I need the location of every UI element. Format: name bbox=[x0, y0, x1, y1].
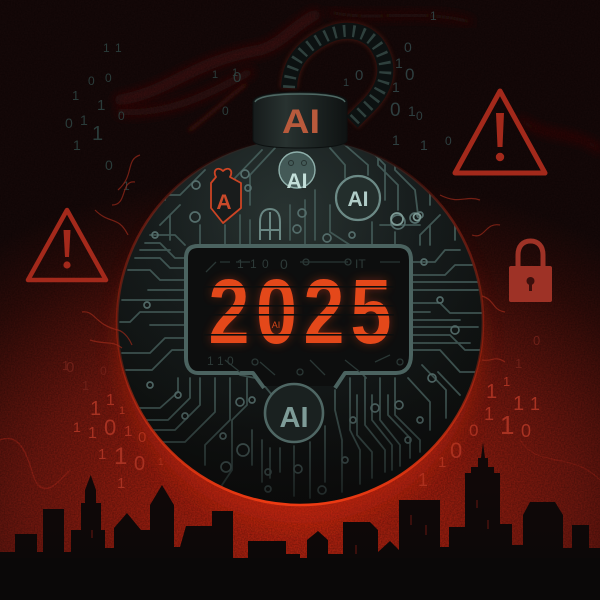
icon: AI circle right bbox=[336, 176, 380, 220]
binary digits: lower right: 1 bbox=[515, 356, 522, 371]
binary digits: upper right: 0 bbox=[405, 65, 414, 84]
binary digits: lower right: 1 bbox=[486, 381, 497, 403]
display binary marks: 1 bbox=[217, 354, 224, 368]
display binary marks: 0 bbox=[262, 257, 269, 271]
binary digits: upper left: 1 bbox=[212, 69, 218, 81]
display binary marks bbox=[207, 256, 366, 368]
icon: warning triangle left bbox=[28, 210, 106, 280]
digits glow: 2 bbox=[208, 260, 249, 363]
binary digits: upper right: 1 bbox=[343, 77, 349, 89]
icon: red AI badge: A bbox=[216, 191, 232, 214]
digits 2025: 2 bbox=[304, 260, 344, 363]
binary digits: lower left: 1 bbox=[82, 378, 89, 393]
ball glow halo bbox=[122, 167, 478, 523]
digits 2025: 0 bbox=[256, 260, 297, 363]
binary digits: lower right: 0 bbox=[521, 421, 531, 441]
binary digits: lower left: 0 bbox=[66, 359, 74, 376]
binary digits: upper left: 1 bbox=[115, 41, 122, 55]
binary digits: lower left: 1 bbox=[90, 398, 101, 420]
icon: red AI badge bbox=[211, 169, 241, 223]
digits 2025: 5 bbox=[350, 260, 391, 363]
display frame bbox=[186, 246, 411, 388]
binary digits: lower left: 0 bbox=[134, 453, 145, 475]
binary digits: lower left: 0 bbox=[104, 415, 116, 440]
display binary marks: 1 bbox=[237, 257, 244, 271]
binary digits: lower right: 0 bbox=[450, 438, 462, 463]
circuit nodes bbox=[144, 170, 459, 494]
digits glow: 2 bbox=[304, 260, 344, 363]
binary digits: lower left: 1 bbox=[114, 443, 127, 470]
digit segment gaps bbox=[204, 286, 394, 336]
binary digits: upper left: 1 bbox=[92, 123, 103, 145]
display inner circuit marks bbox=[206, 259, 403, 375]
binary digits: lower right: 1 bbox=[500, 410, 514, 440]
small AI label in display: AI bbox=[272, 320, 280, 330]
display binary marks: IT bbox=[355, 257, 366, 271]
binary digits: upper right: 1 bbox=[430, 9, 437, 23]
ground fade bbox=[0, 558, 600, 600]
icon: gear node bbox=[391, 213, 420, 225]
binary digits: upper right: 0 bbox=[390, 100, 401, 121]
city skyline bbox=[0, 442, 600, 600]
binary digits: upper left: 1 bbox=[97, 97, 105, 114]
display binary marks: 0 bbox=[280, 256, 288, 272]
neck label: AI bbox=[282, 103, 320, 141]
timer display bbox=[186, 246, 411, 388]
binary digits: upper right: 0 bbox=[404, 39, 412, 55]
bomb neck cap bbox=[253, 92, 347, 148]
binary digits: upper left: 0 bbox=[222, 104, 229, 118]
display binary marks: 0 bbox=[227, 354, 234, 368]
binary digits: upper left: 1 bbox=[73, 137, 81, 153]
binary digits: upper right: 0 bbox=[416, 109, 423, 123]
icon: padlock arch bbox=[260, 209, 280, 240]
binary digits: lower left: 1 bbox=[119, 405, 125, 417]
wires: left bbox=[82, 155, 140, 348]
wires: right bbox=[440, 195, 505, 362]
binary digits: upper left bbox=[65, 41, 241, 193]
binary digits: lower right bbox=[418, 333, 540, 490]
circuit traces bbox=[120, 138, 484, 498]
binary digits: lower left: 1 bbox=[98, 446, 106, 463]
binary digits: lower right: 1 bbox=[513, 393, 524, 415]
binary digits: upper right: 0 bbox=[445, 134, 452, 148]
binary digits: upper left: 1 bbox=[72, 88, 79, 103]
binary digits: upper right: 1 bbox=[392, 132, 400, 148]
icon: AI circle bottom: AI bbox=[280, 402, 308, 434]
binary digits: lower right: 1 bbox=[530, 394, 540, 414]
display binary marks: 1 bbox=[250, 257, 257, 271]
icon: glowing AI chip: AI bbox=[286, 170, 308, 193]
binary digits: upper right: 1 bbox=[395, 55, 403, 71]
binary digits: lower right: 1 bbox=[503, 374, 510, 389]
binary digits: upper left: 1 bbox=[103, 41, 110, 55]
binary digits: lower left: 1 bbox=[158, 457, 164, 468]
digits glow bbox=[208, 260, 391, 363]
binary digits: lower right: 1 bbox=[418, 470, 428, 490]
digits glow: 0 bbox=[256, 260, 297, 363]
binary digits: upper right: 1 bbox=[408, 103, 416, 119]
binary digits: lower left: 1 bbox=[106, 392, 115, 409]
skyline windows bbox=[91, 500, 489, 554]
digits 2025: 2 bbox=[208, 260, 249, 363]
binary digits: upper left: 1 bbox=[123, 179, 130, 193]
binary digits: lower left: 1 bbox=[124, 423, 132, 440]
background: storm clouds bbox=[0, 12, 600, 489]
binary digits: lower left: 1 bbox=[73, 419, 81, 435]
icon: AI circle right: AI bbox=[348, 188, 368, 211]
binary digits: upper left: 0 bbox=[233, 69, 241, 86]
bomb sphere bbox=[117, 139, 483, 505]
icon: warning triangle right bbox=[455, 91, 545, 173]
binary digits: lower left: 0 bbox=[100, 364, 107, 378]
binary digits: lower right: 1 bbox=[484, 404, 494, 424]
icon: padlock bbox=[509, 241, 552, 302]
binary digits: upper left: 1 bbox=[232, 67, 238, 79]
display binary marks: 1 bbox=[207, 354, 214, 368]
binary digits: upper left: 0 bbox=[118, 109, 125, 123]
digits glow: 5 bbox=[350, 260, 391, 363]
display fill bbox=[186, 246, 411, 386]
binary digits: upper left: 1 bbox=[80, 112, 88, 128]
binary digits: upper right: 1 bbox=[420, 137, 428, 153]
icon: glowing AI chip bbox=[279, 152, 315, 193]
binary digits: lower left bbox=[62, 358, 164, 492]
fuse rope bbox=[289, 31, 385, 122]
bomb bbox=[117, 31, 484, 505]
binary digits: upper right: 0 bbox=[355, 67, 363, 84]
sphere lower shade bbox=[117, 139, 483, 505]
binary digits: lower left: 1 bbox=[117, 475, 125, 492]
digits 2025 bbox=[208, 260, 391, 363]
binary digits: upper left: 0 bbox=[65, 115, 73, 131]
icon: AI circle bottom bbox=[265, 384, 323, 442]
binary digits: upper left: 0 bbox=[88, 74, 95, 88]
binary digits: upper right: 1 bbox=[392, 79, 400, 95]
binary digits: upper left: 0 bbox=[105, 157, 113, 173]
binary digits: lower right: 0 bbox=[469, 421, 478, 440]
binary digits: upper right bbox=[343, 9, 452, 153]
binary digits: lower right: 1 bbox=[438, 454, 446, 471]
sphere red rim bbox=[117, 139, 483, 505]
binary digits: lower left: 1 bbox=[88, 425, 97, 442]
binary digits: upper left: 0 bbox=[105, 71, 112, 85]
binary digits: lower left: 0 bbox=[138, 429, 146, 446]
binary digits: lower left: 1 bbox=[62, 358, 69, 373]
binary digits: lower right: 0 bbox=[533, 333, 540, 348]
